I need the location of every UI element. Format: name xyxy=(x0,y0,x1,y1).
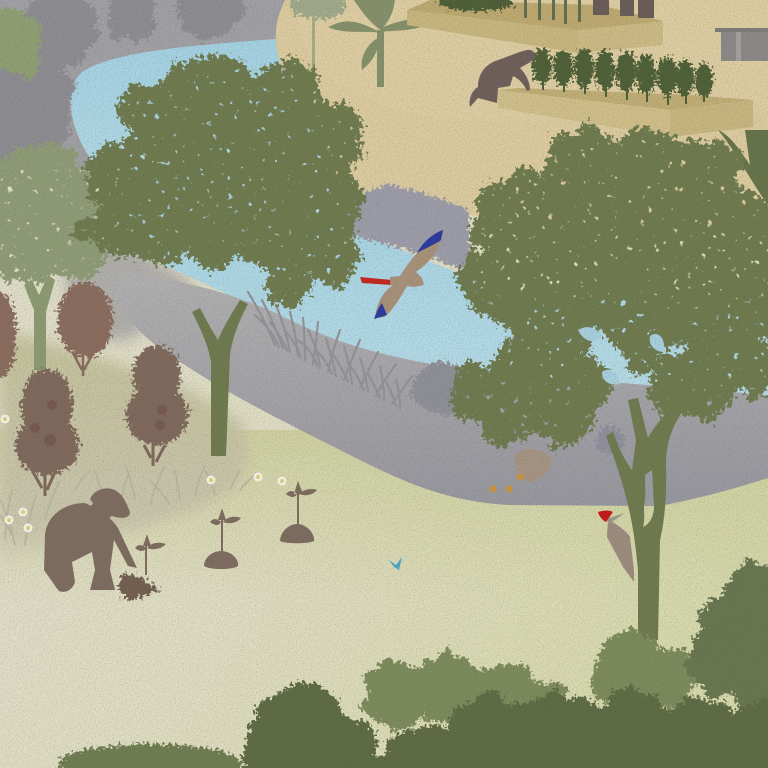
crown xyxy=(446,128,768,450)
brown shrub upper xyxy=(57,282,113,376)
raised bed: upper xyxy=(407,0,663,53)
brown shrub right xyxy=(126,345,188,466)
faded shrub near far tree xyxy=(596,426,624,454)
river: main channel xyxy=(100,150,768,440)
background: greener ground band xyxy=(0,430,768,600)
brown shrub left xyxy=(15,369,79,496)
background: far gray hillside xyxy=(0,0,300,170)
bush: light mid xyxy=(361,654,569,732)
seedling: right xyxy=(280,481,317,543)
head and neck xyxy=(90,500,114,520)
person: crouching at bed xyxy=(469,50,535,107)
bush: at tree base xyxy=(592,634,698,708)
hat xyxy=(90,488,130,518)
banana leaves behind right tree xyxy=(718,130,768,205)
person: gardener planting xyxy=(44,488,137,592)
tree: banana plant on terrace xyxy=(328,0,433,87)
body xyxy=(44,503,137,592)
bush: right xyxy=(692,562,768,711)
far gray shrubs by river xyxy=(340,184,472,272)
trunk and branches xyxy=(606,398,688,640)
armadillo animal with bees xyxy=(490,449,552,492)
storage box xyxy=(715,28,768,61)
bush: dark foreground xyxy=(241,684,768,768)
gray river bank xyxy=(115,272,768,506)
brown shrub far left xyxy=(0,293,16,377)
faded top left tree xyxy=(0,6,40,76)
trunk gap: bank xyxy=(644,470,654,506)
top left gray foliage xyxy=(0,0,242,167)
gray patch behind left tree xyxy=(60,160,195,340)
tree: faded terrace sapling xyxy=(290,0,346,75)
plants: lower bed xyxy=(532,48,713,105)
sand terrace: lighter arc xyxy=(298,0,768,122)
soil clump at gardener hands xyxy=(118,574,160,602)
plants: upper bed xyxy=(438,0,514,11)
bird: woodpecker xyxy=(598,510,634,582)
bird: flying macaw xyxy=(360,230,443,319)
sand terrace xyxy=(276,0,768,240)
gray shrub on bank xyxy=(410,362,478,415)
gaps in right tree xyxy=(578,327,664,384)
bush: bottom left xyxy=(58,744,242,768)
raised bed: lower xyxy=(498,88,753,137)
trunk xyxy=(192,300,248,456)
river: upper bend xyxy=(71,39,360,250)
flowers: daisies xyxy=(0,414,286,532)
tree: large left tree xyxy=(80,56,363,456)
crown xyxy=(80,56,363,304)
seedling: middle xyxy=(204,508,241,569)
reeds on river bank xyxy=(248,292,412,408)
butterfly xyxy=(389,557,402,570)
seedling: at gardener xyxy=(135,534,166,575)
tree: large right tree xyxy=(446,128,768,640)
faded left tree xyxy=(0,142,106,370)
trunk gap: ground xyxy=(643,506,654,527)
meadow on left xyxy=(0,330,248,565)
meadow grass xyxy=(0,465,255,545)
